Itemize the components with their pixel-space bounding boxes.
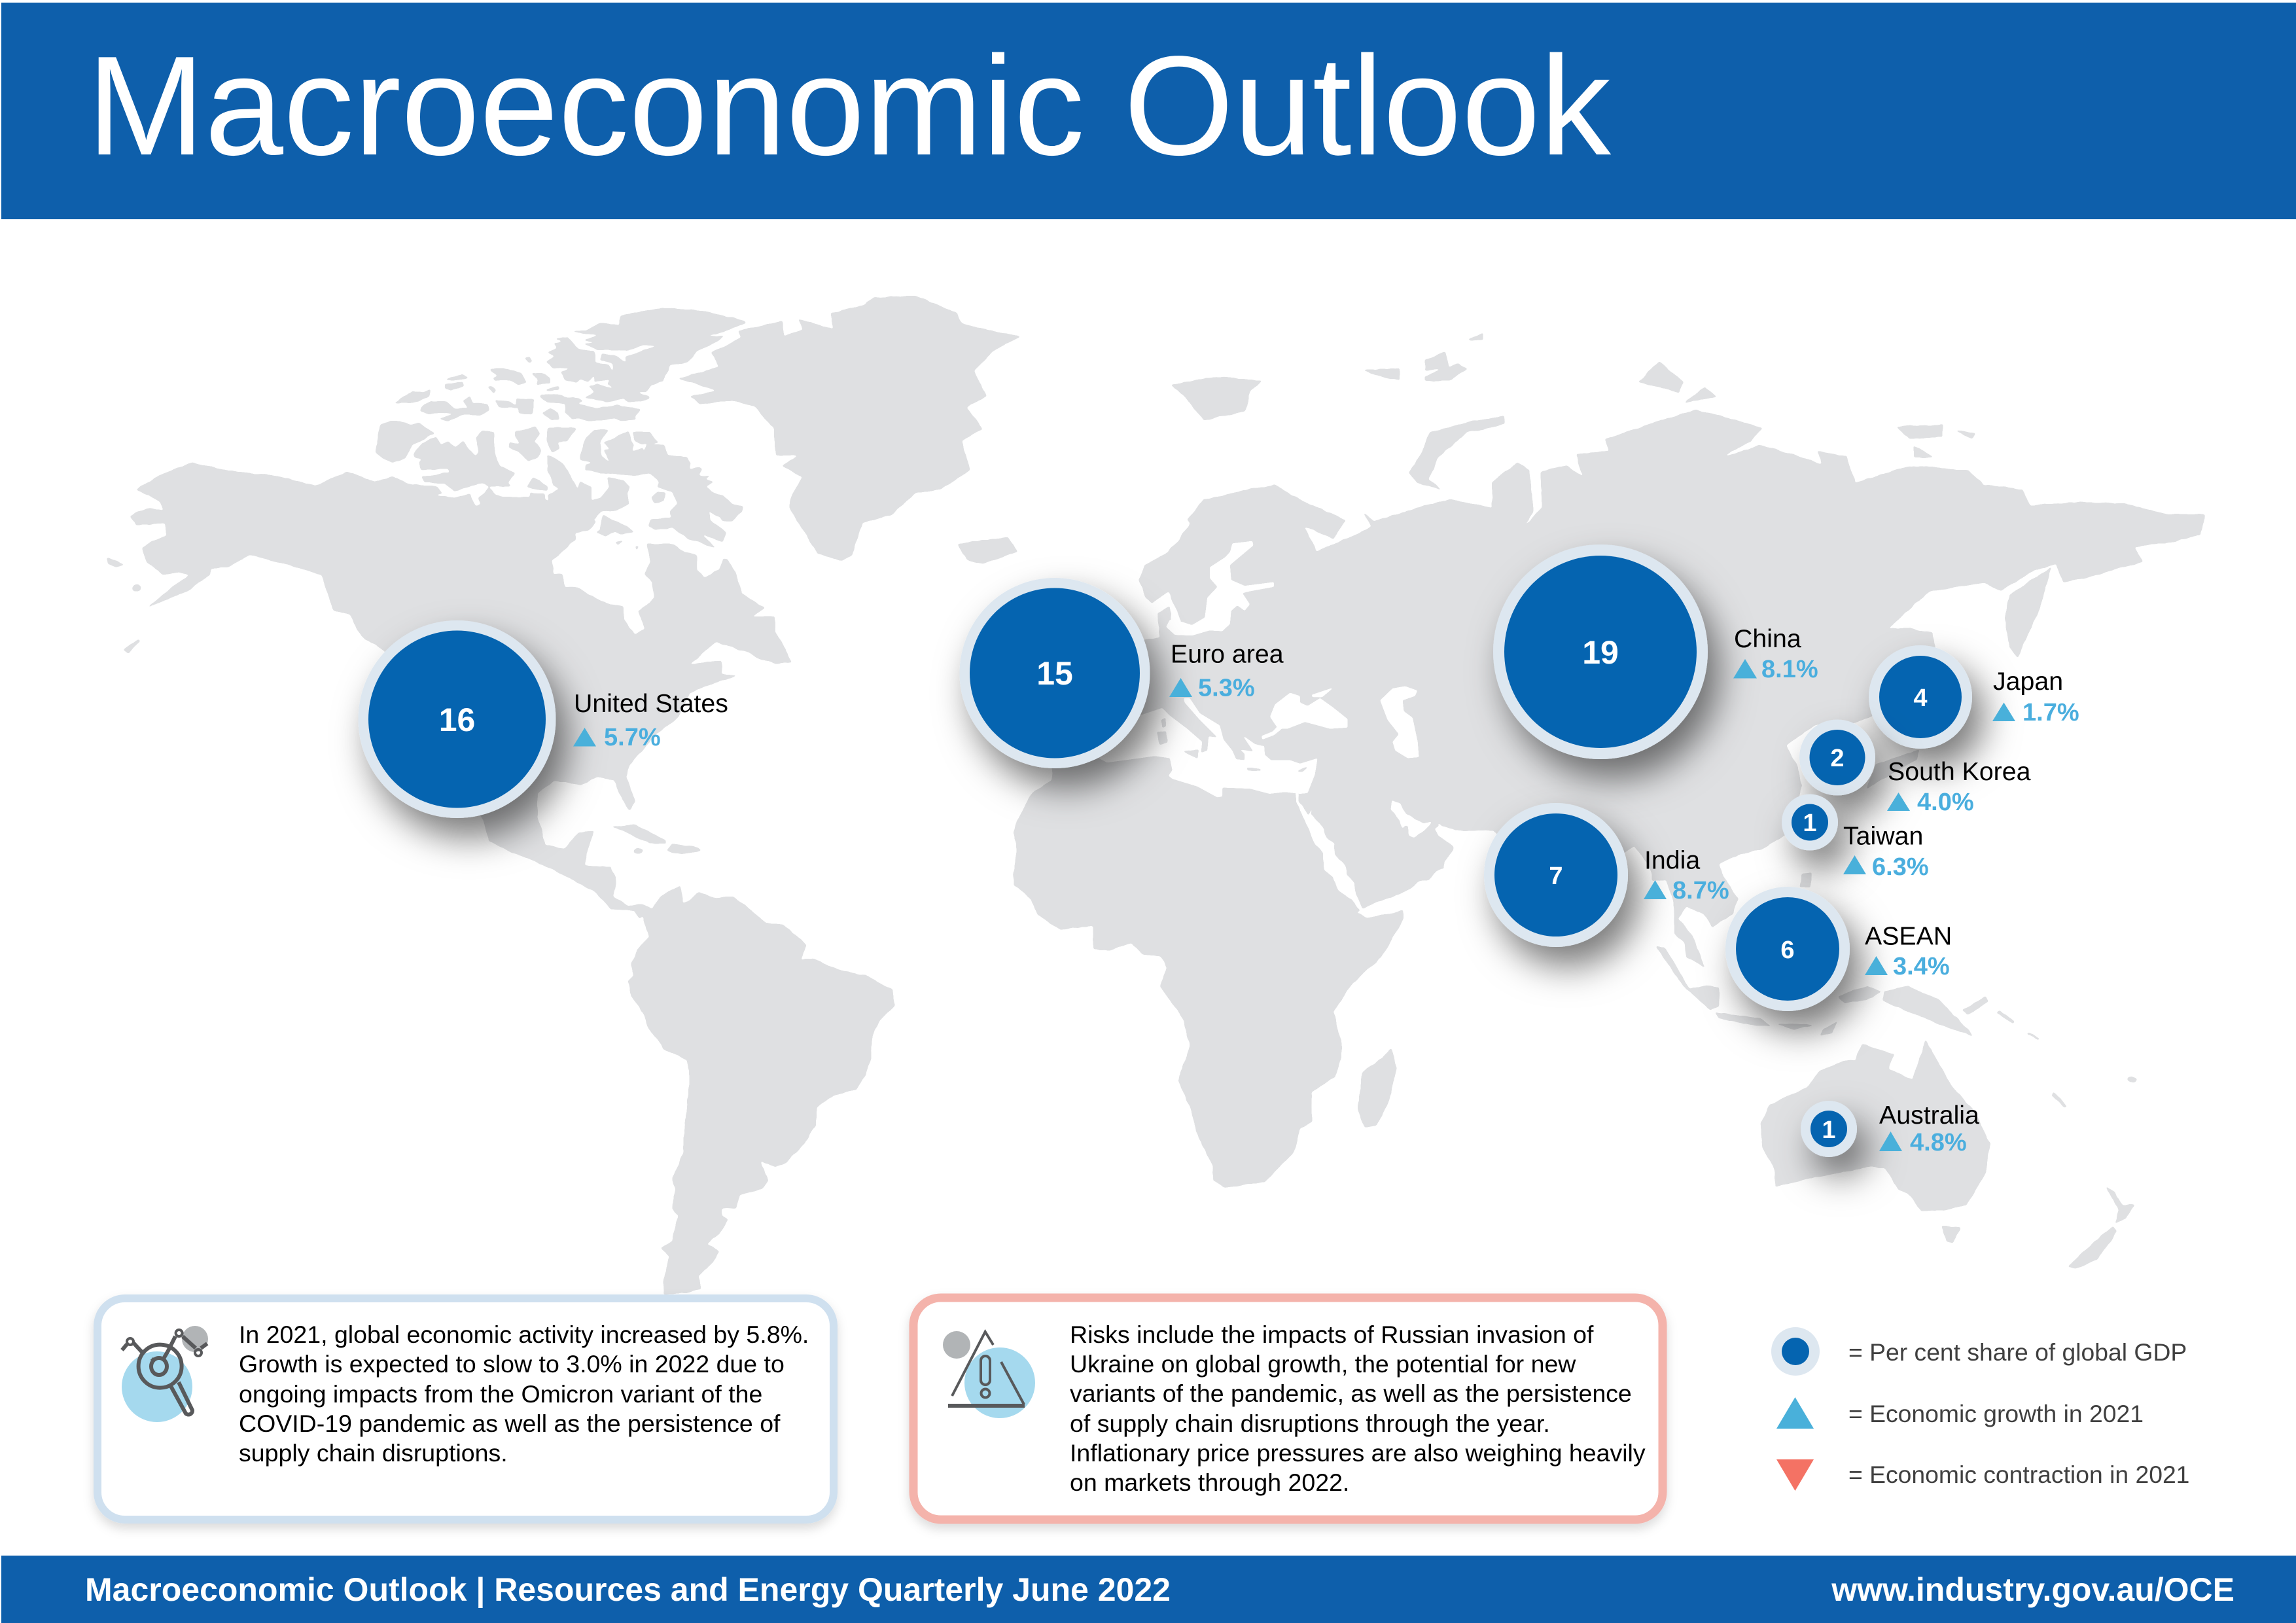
label: Taiwan: 6.3% xyxy=(1872,853,1929,881)
label: Taiwan xyxy=(1843,822,1929,881)
bubble: India: 7 xyxy=(1549,863,1563,890)
label: Euro area: Euro area xyxy=(1171,640,1284,669)
bubble: Australia xyxy=(1801,1101,1857,1157)
legend xyxy=(1771,1327,2189,1491)
legend: GDP share xyxy=(1771,1327,2187,1376)
bubble: South Korea xyxy=(1799,720,1875,796)
label: ASEAN xyxy=(1865,921,1952,980)
landmass: Africa xyxy=(1014,758,1404,1187)
bubble: South Korea: 2 xyxy=(1830,745,1845,772)
sea: Marmara xyxy=(1262,726,1281,740)
label: China xyxy=(1733,624,1818,683)
bubble: India xyxy=(1484,803,1628,947)
label: Australia: 4.8% xyxy=(1910,1129,1967,1156)
panel: global activity summary xyxy=(97,1298,834,1520)
legend: GDP share: = Per cent share of global GDP xyxy=(1848,1338,2187,1366)
label: United States: United States xyxy=(574,689,728,718)
header band xyxy=(1,3,2296,219)
label: South Korea xyxy=(1887,757,2031,816)
summary text: COVID-19 pandemic as well as the persistence of xyxy=(239,1410,781,1437)
label: Japan xyxy=(1992,667,2079,726)
icon: magnifier over line chart xyxy=(122,1326,208,1422)
South-East Asia islands xyxy=(1655,873,2136,1107)
risks text: Ukraine on global growth, the potential for new xyxy=(1070,1350,1576,1378)
landmass: Madagascar xyxy=(1358,1048,1397,1128)
legend: contraction: = Economic contraction in 2021 xyxy=(1848,1461,2189,1488)
bubble: China: 19 xyxy=(1582,634,1619,671)
label: ASEAN: ASEAN xyxy=(1865,921,1952,950)
Mediterranean islands xyxy=(1156,718,1309,772)
Japan and Sakhalin xyxy=(1866,566,2051,789)
label: Taiwan: Taiwan xyxy=(1843,822,1923,851)
landmass: Eurasia xyxy=(1047,410,2205,968)
sea: Baltic xyxy=(1166,541,1274,635)
label: ASEAN: 3.4% xyxy=(1893,953,1950,980)
Arctic and North Atlantic islands xyxy=(958,332,1975,564)
sea: Black Sea xyxy=(1270,693,1348,729)
landmass: Greenland xyxy=(678,295,1021,561)
label: South Korea: South Korea xyxy=(1888,757,2031,786)
risks text: of supply chain disruptions through the year. xyxy=(1070,1410,1550,1437)
bubble: Taiwan xyxy=(1782,794,1838,851)
label: United States xyxy=(573,689,728,751)
landmass: islands xyxy=(958,332,2136,1268)
landmass: Arctic Canada islands xyxy=(375,308,746,551)
risks text: variants of the pandemic, as well as the persistence xyxy=(1070,1380,1632,1407)
label: India xyxy=(1644,846,1729,904)
risks text: on markets through 2022. xyxy=(1070,1469,1349,1496)
Tasmania xyxy=(1941,1225,1961,1243)
bubble: Japan xyxy=(1869,645,1972,749)
sea: Caspian xyxy=(1380,686,1419,758)
label: India: India xyxy=(1644,846,1700,874)
label: Euro area xyxy=(1169,640,1284,702)
panel: risks xyxy=(913,1298,1663,1520)
bubble: Japan: 4 xyxy=(1913,685,1928,712)
bubble: China xyxy=(1493,544,1708,759)
risks text xyxy=(1070,1321,1646,1496)
label: Japan: Japan xyxy=(1993,667,2063,696)
seas: inland white water xyxy=(1092,541,1419,798)
summary text xyxy=(239,1321,809,1467)
risks text: Inflationary price pressures are also weighing heavily xyxy=(1070,1439,1646,1467)
sea: Azov xyxy=(1311,687,1334,697)
label: Australia: Australia xyxy=(1879,1101,1979,1130)
title: Macroeconomic Outlook xyxy=(87,26,1612,185)
legend: growth: = Economic growth in 2021 xyxy=(1848,1400,2144,1427)
bubble: United States: 16 xyxy=(439,702,475,738)
label: Euro area: 5.3% xyxy=(1198,674,1255,702)
landmasses xyxy=(107,295,2205,1294)
Australia xyxy=(1761,1040,1990,1211)
footer title: Macroeconomic Outlook | Resources and Energy Quarterly June 2022 xyxy=(85,1571,1171,1609)
landmass: Caribbean and Pacific islands of America xyxy=(107,558,701,854)
label: China: 8.1% xyxy=(1761,656,1818,683)
summary text: ongoing impacts from the Omicron variant of the xyxy=(239,1380,762,1408)
label: Australia xyxy=(1879,1101,1979,1156)
risks text: Risks include the impacts of Russian invasion of xyxy=(1070,1321,1594,1348)
icon: warning triangle xyxy=(943,1331,1035,1418)
sea: Mediterranean xyxy=(1092,698,1318,798)
bubble: Euro area xyxy=(959,578,1150,768)
bubble: Australia: 1 xyxy=(1822,1116,1836,1144)
footer band xyxy=(1,1556,2296,1623)
bubble: Euro area: 15 xyxy=(1036,655,1073,692)
label: China: China xyxy=(1734,624,1801,653)
summary text: supply chain disruptions. xyxy=(239,1439,508,1467)
summary text: Growth is expected to slow to 3.0% in 2022 due to xyxy=(239,1350,785,1378)
New Zealand xyxy=(2068,1186,2135,1268)
world map xyxy=(107,295,2205,1294)
label: India: 8.7% xyxy=(1672,877,1729,904)
label: Japan: 1.7% xyxy=(2022,699,2079,726)
label: United States: 5.7% xyxy=(604,724,661,751)
bubble: ASEAN xyxy=(1725,887,1850,1011)
landmass: South America xyxy=(627,885,894,1294)
bubble: ASEAN: 6 xyxy=(1780,936,1795,964)
bubble: Taiwan: 1 xyxy=(1803,810,1817,837)
summary text: In 2021, global economic activity increased by 5.8%. xyxy=(239,1321,809,1348)
landmass: North and Central America xyxy=(130,454,792,918)
footer url: www.industry.gov.au/OCE xyxy=(1831,1571,2234,1608)
bubble: United States xyxy=(359,620,556,818)
label: South Korea: 4.0% xyxy=(1917,789,1974,816)
